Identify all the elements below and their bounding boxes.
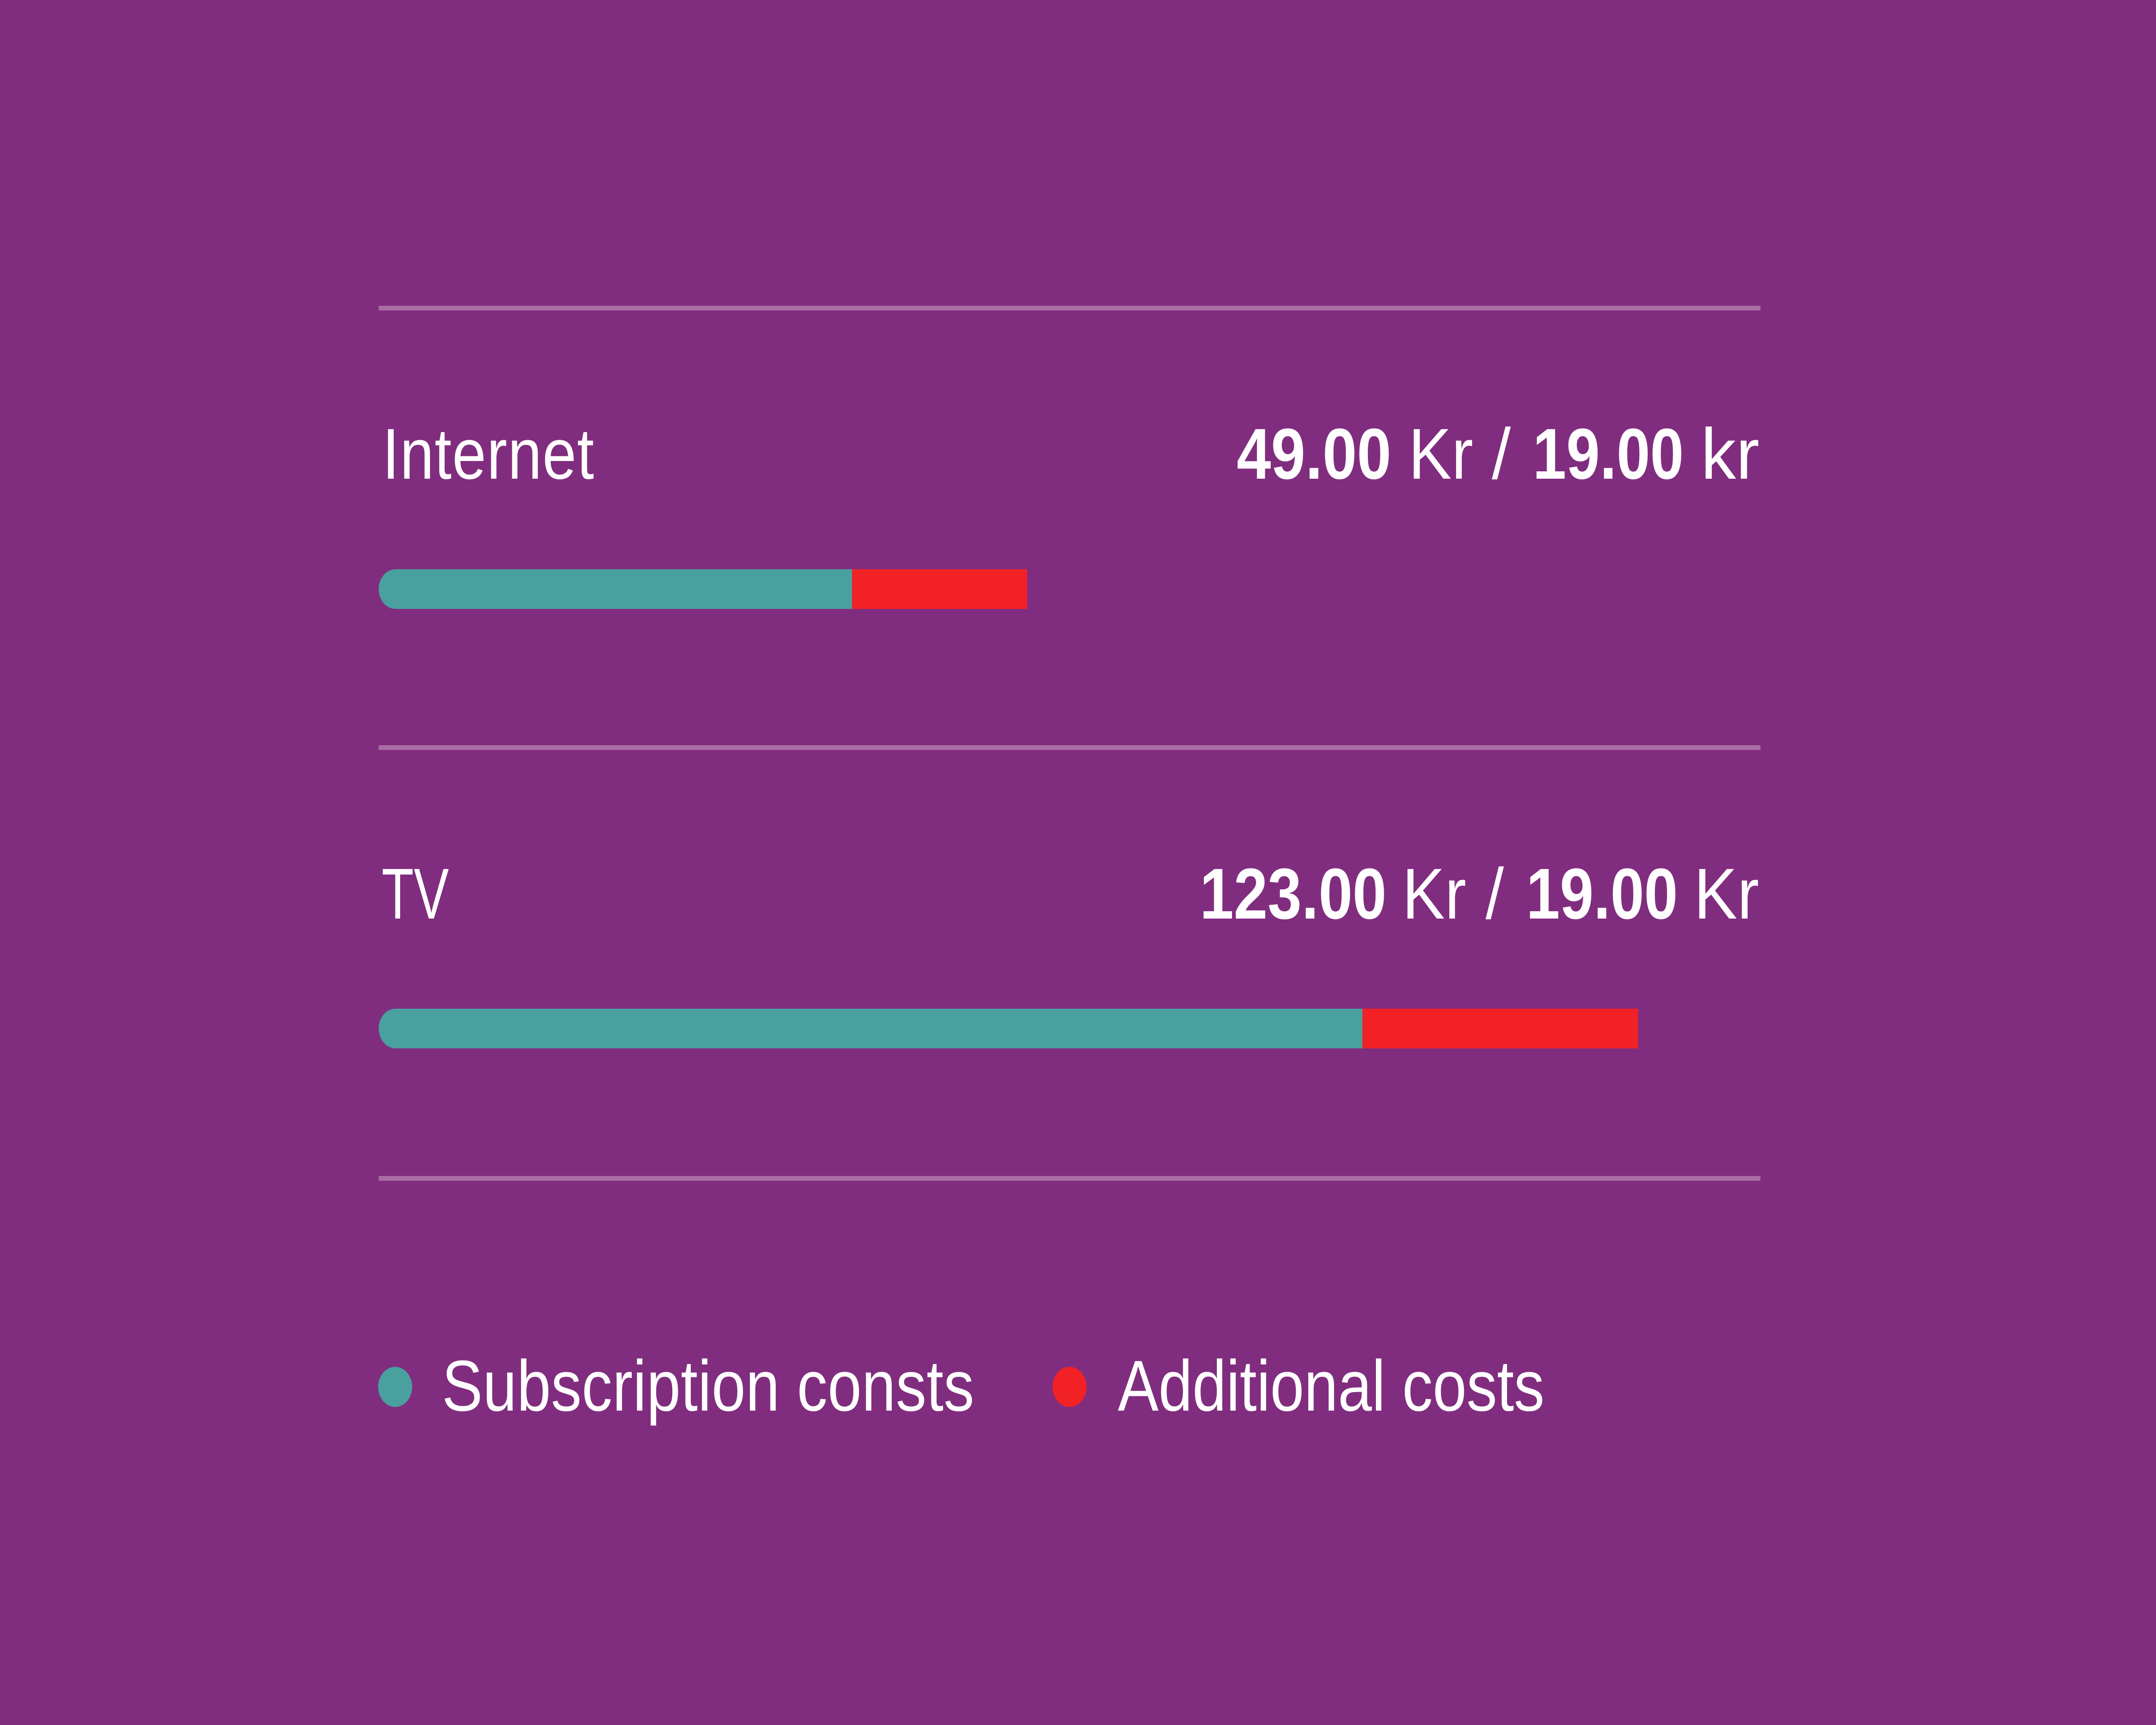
panel: internet row (379, 414, 1759, 609)
label: Internet: Internet (382, 414, 594, 494)
legend item: subscription: Subscription consts (442, 1346, 974, 1426)
panel: tv row (379, 853, 1759, 1048)
value: TV costs: / (1485, 853, 1504, 934)
value: TV costs: 123.00 (1200, 853, 1386, 934)
legend (378, 1346, 1545, 1426)
value: TV costs: 19.00 (1526, 853, 1678, 934)
value: Internet costs: / (1492, 414, 1511, 494)
value: TV costs: Kr (1402, 853, 1466, 934)
legend item: additional: Additional costs (1118, 1346, 1545, 1426)
value: Internet costs: 19.00 (1533, 414, 1684, 494)
bar: Internet stacked (379, 569, 1027, 609)
bar: TV stacked (379, 1009, 1638, 1048)
value: Internet costs: Kr (1408, 414, 1473, 494)
value: Internet costs: kr (1701, 414, 1759, 494)
value: Internet costs: 49.00 (1237, 414, 1391, 494)
value: Internet costs (1237, 414, 1759, 494)
value: TV costs: Kr (1694, 853, 1759, 934)
value: TV costs (1200, 853, 1759, 934)
label: TV: TV (382, 853, 449, 934)
